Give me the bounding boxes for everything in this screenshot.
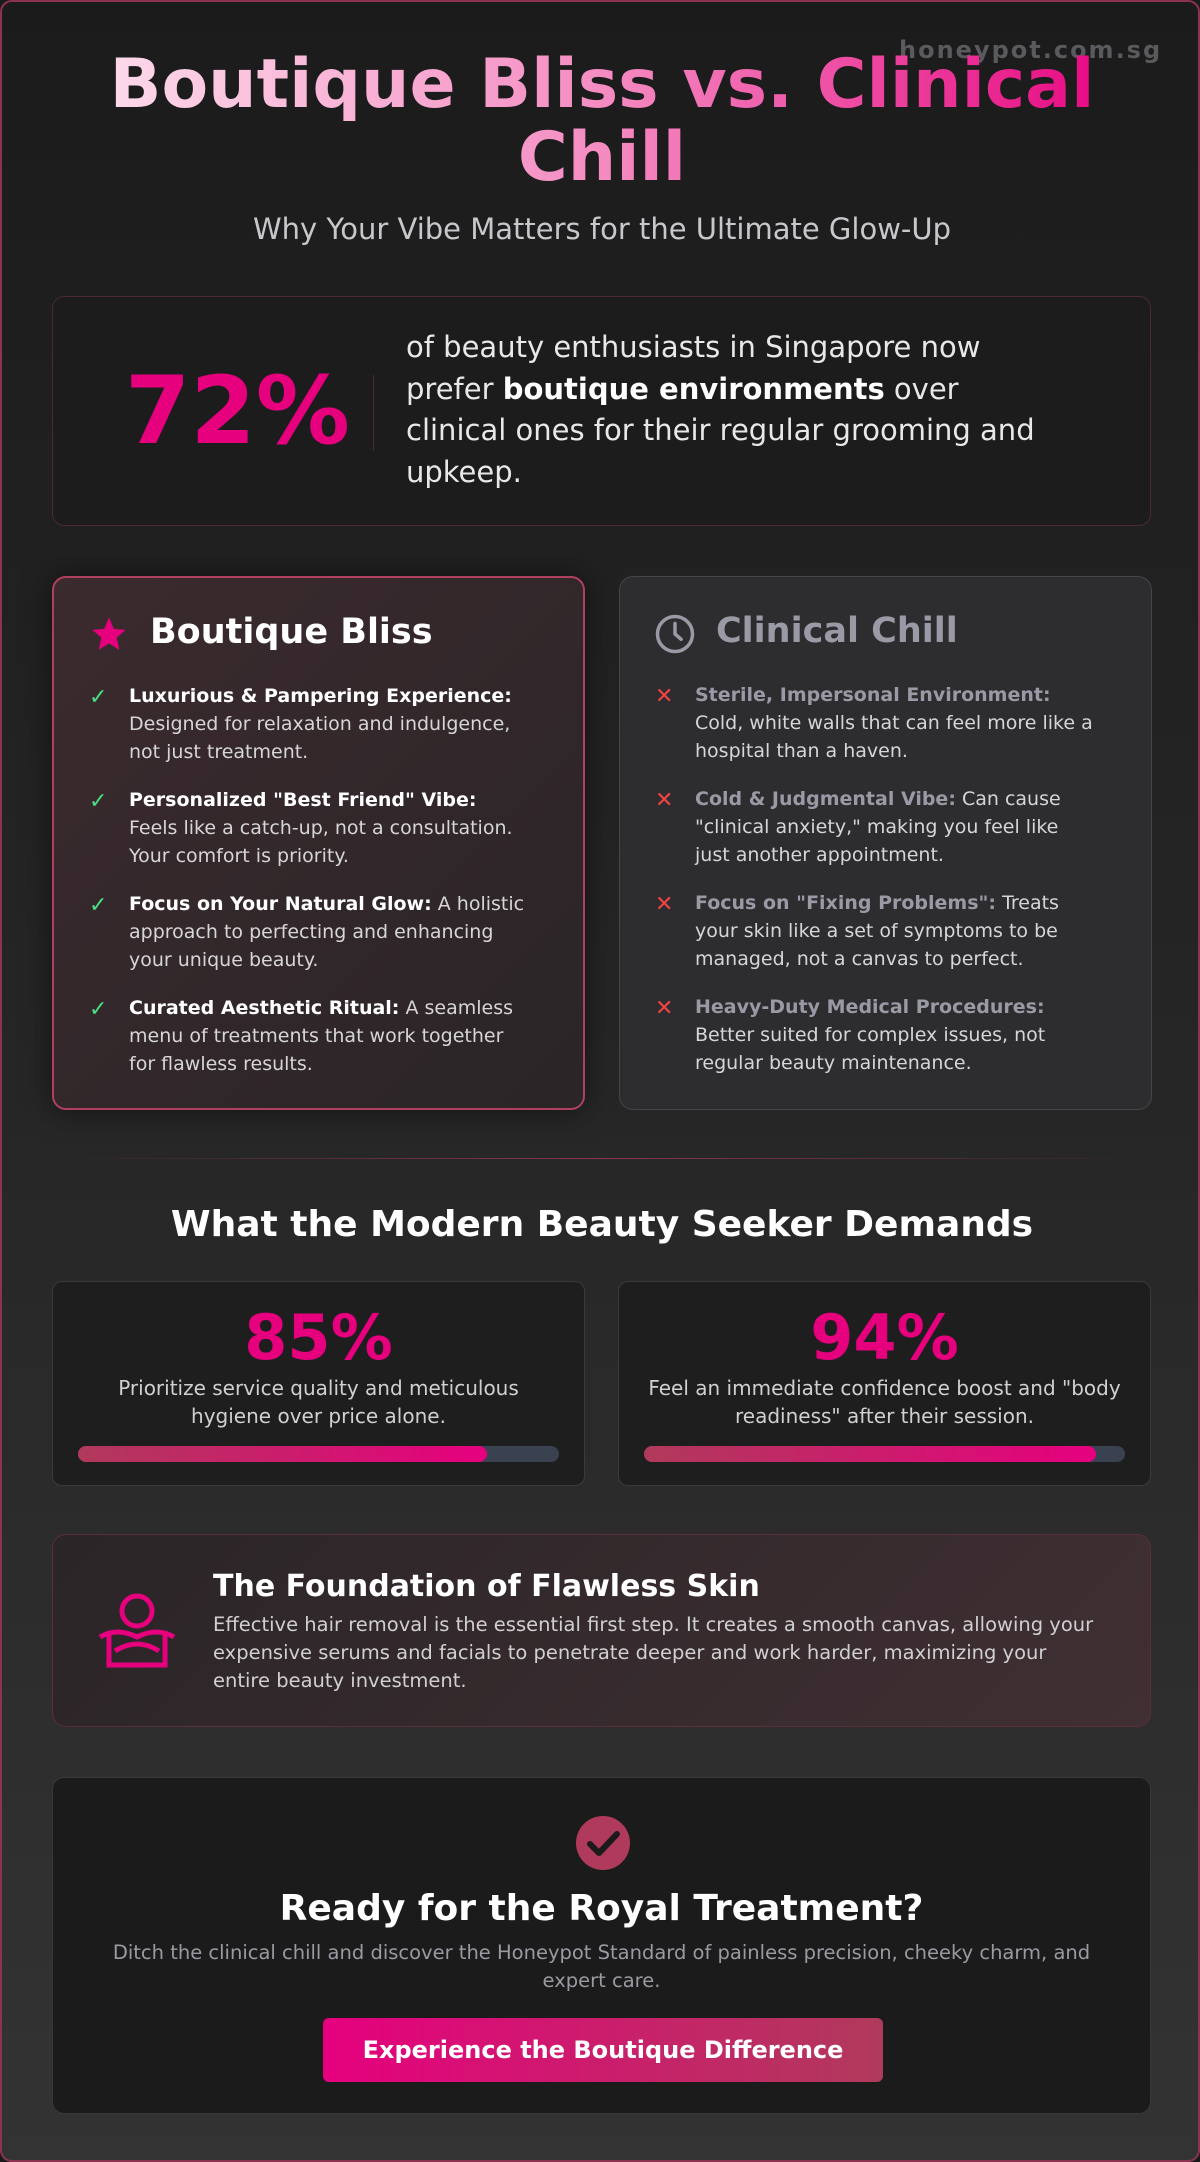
panel: boutique bliss: ✓ <box>89 789 107 814</box>
panel: boutique bliss: ✓ <box>89 893 107 918</box>
item 3: Focus on Your Natural Glow: A holistic approach to perfecting and enhancing your unique beauty. <box>129 893 524 971</box>
text: Effective hair removal is the essential first step. It creates a smooth canvas, allowing your expensive serums and facials to penetrate deeper and work harder, maximizing your entire beauty investment. <box>213 1613 1093 1692</box>
panel: boutique bliss: ✓ <box>89 997 107 1022</box>
icon: person <box>98 1594 176 1668</box>
stat card: 94%: 94% <box>810 1301 959 1374</box>
panel: foundation <box>52 1534 1151 1727</box>
stat card: 94%: Feel an immediate confidence boost and "body readiness" after their session. <box>648 1376 1121 1428</box>
panel: clinical chill: ✕ <box>655 996 673 1021</box>
watermark: honeypot.com.sg <box>899 36 1162 64</box>
heading: Boutique Bliss <box>150 612 433 652</box>
icon: clock <box>656 614 694 654</box>
CTA heading: Ready for the Royal Treatment? <box>280 1888 923 1929</box>
subtitle: Why Your Vibe Matters for the Ultimate Glow-Up <box>253 212 951 246</box>
panel: clinical chill <box>619 576 1152 1110</box>
button <box>323 2018 883 2082</box>
panel: clinical chill: ✕ <box>655 892 673 917</box>
item 2: Personalized "Best Friend" Vibe: Feels like a catch-up, not a consultation. Your comfort is priority. <box>129 789 513 867</box>
progress bar 94 <box>644 1446 1125 1462</box>
panel: clinical chill: ✕ <box>655 788 673 813</box>
panel: 72% stat <box>52 296 1151 526</box>
stat card: 85%: Prioritize service quality and meticulous hygiene over price alone. <box>118 1376 519 1428</box>
stat card: 85%: 85% <box>244 1301 393 1374</box>
item 2: Cold & Judgmental Vibe: Can cause "clinical anxiety," making you feel like just another appointment. <box>695 788 1061 866</box>
panel: CTA <box>52 1777 1151 2114</box>
heading: Clinical Chill <box>716 611 958 651</box>
stat card: 94% <box>618 1281 1151 1486</box>
panel: clinical chill: ✕ <box>655 684 673 709</box>
progress bar 85 <box>78 1446 559 1462</box>
title: Boutique Bliss vs. Clinical Chill <box>110 45 1094 197</box>
item 3: Focus on "Fixing Problems": Treats your skin like a set of symptoms to be managed, not a canvas to perfect. <box>695 892 1059 970</box>
CTA text: Ditch the clinical chill and discover the Honeypot Standard of painless precision, cheeky charm, and expert care. <box>113 1941 1090 1992</box>
icon: check circle <box>576 1816 630 1870</box>
item 4: Heavy-Duty Medical Procedures: Better suited for complex issues, not regular beauty maintenance. <box>695 996 1045 1074</box>
item 1: Luxurious & Pampering Experience: Designed for relaxation and indulgence, not just treatment. <box>129 685 512 763</box>
item 4: Curated Aesthetic Ritual: A seamless menu of treatments that work together for flawless results. <box>129 997 513 1075</box>
item 1: Sterile, Impersonal Environment: Cold, white walls that can feel more like a hospital than a haven. <box>695 684 1093 762</box>
section heading: What the Modern Beauty Seeker Demands <box>171 1204 1033 1245</box>
button: Experience the Boutique Difference <box>363 2036 843 2064</box>
panel: boutique bliss: ✓ <box>89 685 107 710</box>
panel: boutique bliss <box>52 576 585 1110</box>
big number: 72% <box>125 357 350 466</box>
stat text: of beauty enthusiasts in Singapore now prefer boutique environments over clinical ones for their regular grooming and upkeep. <box>406 330 1035 488</box>
icon: star <box>92 618 126 650</box>
stat card: 85% <box>52 1281 585 1486</box>
heading: The Foundation of Flawless Skin <box>213 1569 760 1604</box>
